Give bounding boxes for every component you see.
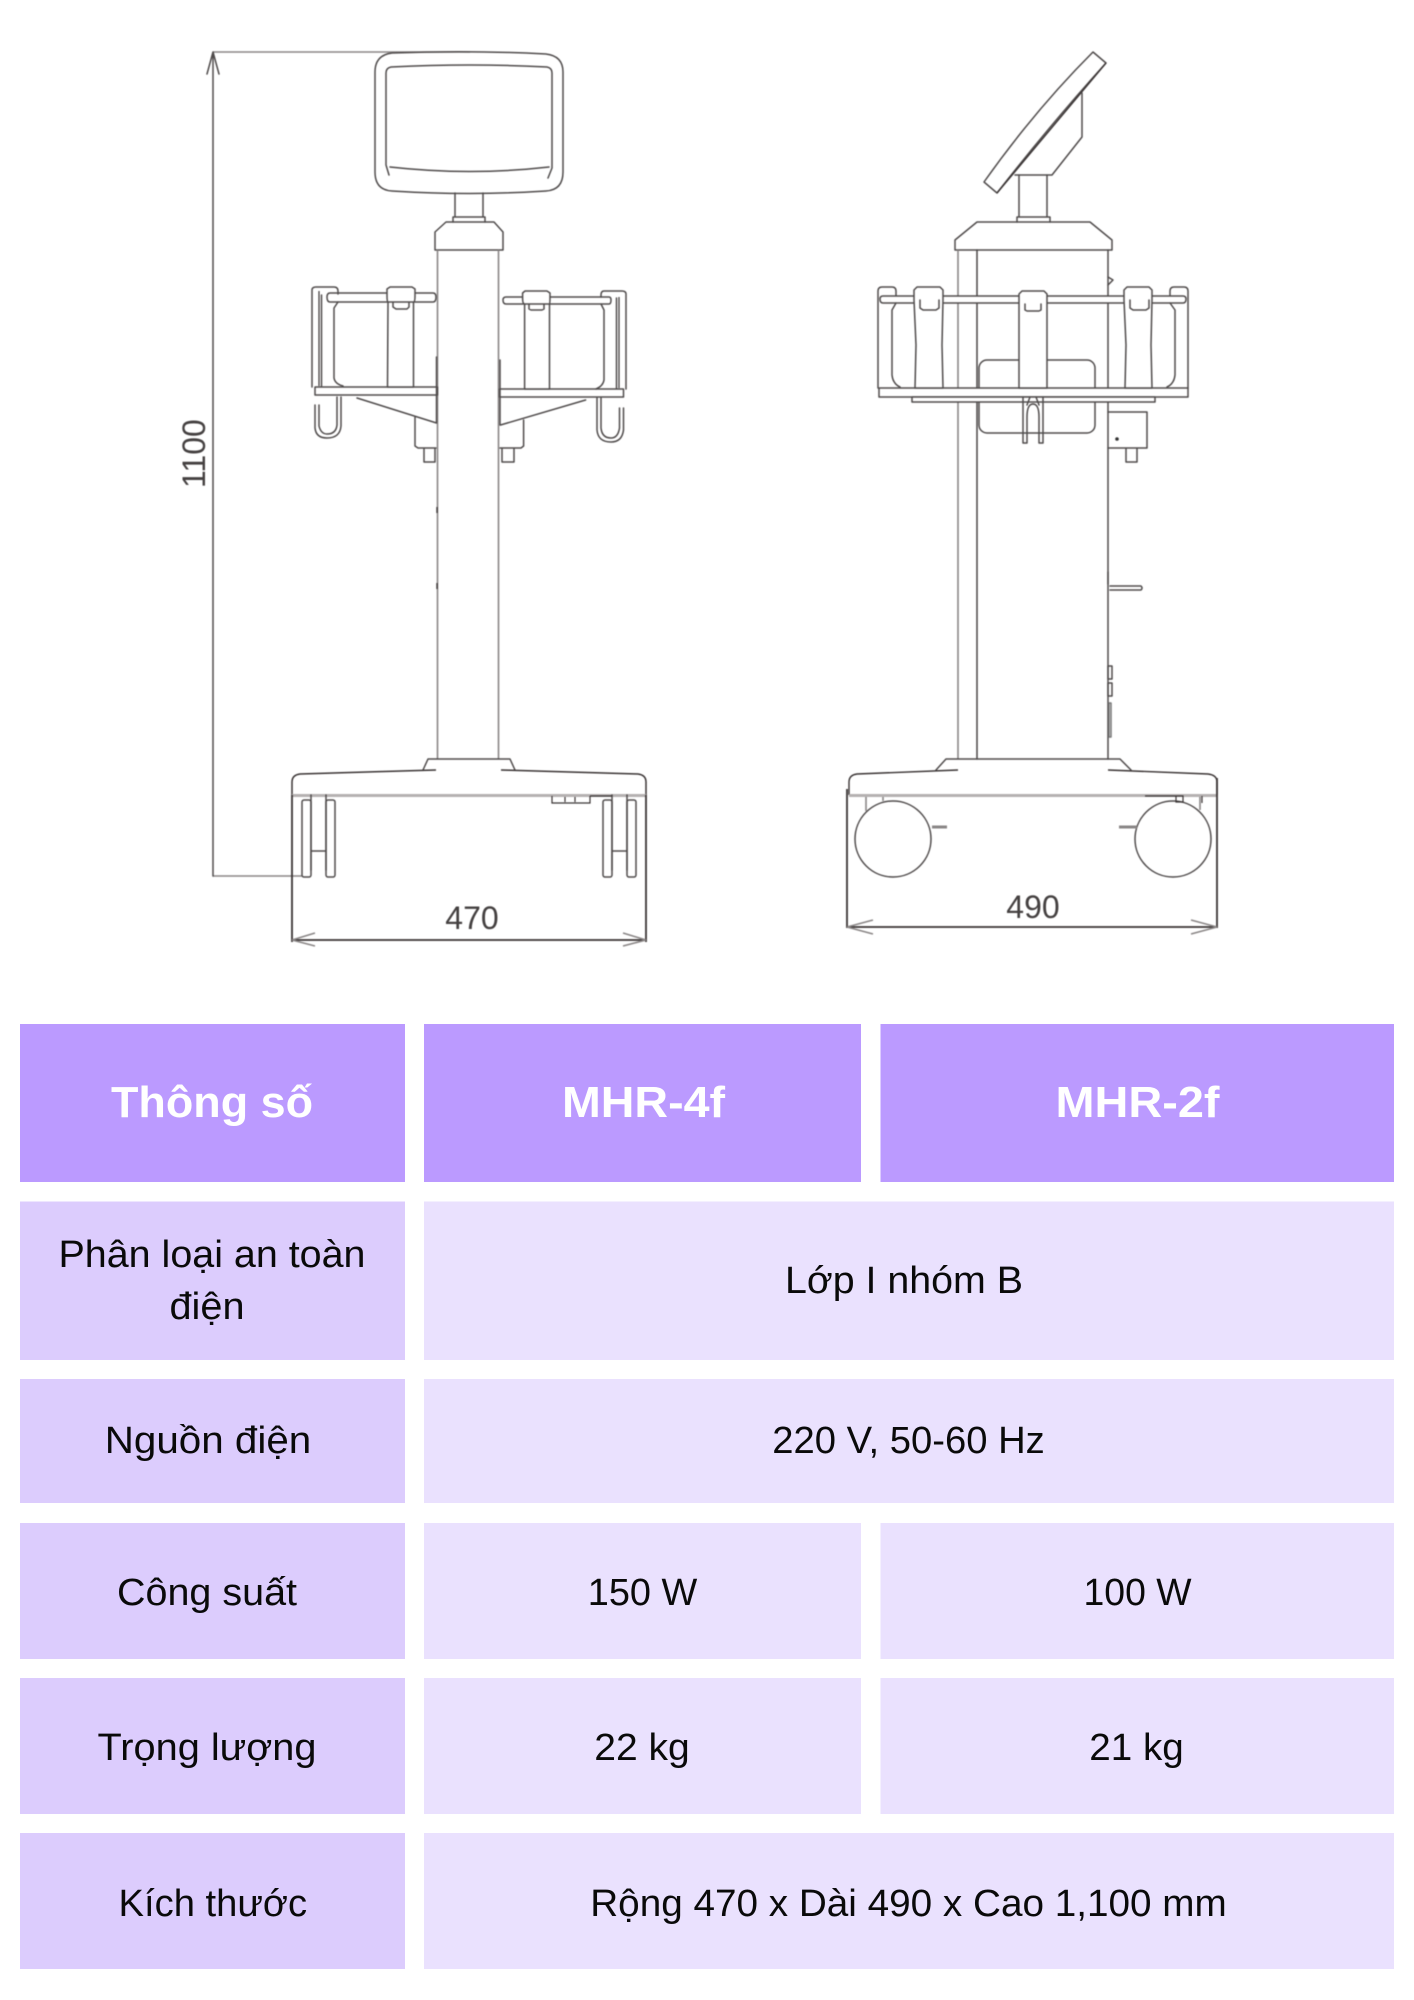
header cell: MHR-2f: MHR-2f: [1056, 1078, 1220, 1127]
dimension: depth 490: 490: [1006, 889, 1060, 925]
label cell: Kích thước: [119, 1883, 307, 1925]
row: weight: [20, 1678, 1394, 1814]
monitor front: [375, 52, 563, 193]
neck and collar: [435, 193, 503, 250]
neck and head: [955, 175, 1112, 250]
column: [438, 250, 498, 759]
label cell: [20, 1523, 405, 1659]
panel: specification table: [20, 1024, 1394, 1969]
label cell: Nguồn điện: [105, 1420, 311, 1462]
value cell: Rộng 470 x Dài 490 x Cao 1,100 mm: [590, 1883, 1227, 1925]
value cell: [424, 1379, 1394, 1503]
drawing: MHR-2f side view: [847, 52, 1217, 934]
dimension: width 470: [292, 795, 646, 946]
monitor side: [984, 52, 1106, 193]
label cell: [20, 1833, 405, 1969]
value cell: [424, 1202, 1394, 1360]
value cell: MHR-4f: [424, 1678, 861, 1814]
panel: technical drawings: [176, 52, 1217, 946]
body: [958, 250, 1113, 759]
value cell: 220 V, 50-60 Hz: [772, 1420, 1045, 1462]
value cell: MHR-4f: 150 W: [588, 1572, 697, 1614]
value cell: MHR-2f: [880, 1678, 1394, 1814]
header cell: MHR-4f: [424, 1024, 861, 1182]
row: dimensions: [20, 1833, 1394, 1969]
value cell: MHR-2f: 100 W: [1084, 1572, 1192, 1614]
value cell: [424, 1833, 1394, 1969]
value cell: MHR-2f: [880, 1523, 1394, 1659]
left basket: [312, 287, 438, 462]
side fittings: [1108, 572, 1142, 737]
value cell: MHR-4f: [424, 1523, 861, 1659]
basket: [878, 287, 1188, 462]
value cell: MHR-4f: 22 kg: [594, 1727, 690, 1769]
header cell: Thông số: Thông số: [111, 1078, 313, 1127]
label cell: Công suất: [117, 1572, 297, 1614]
dimension: height 1100: 1100: [176, 419, 212, 488]
base and wheels: [292, 759, 646, 877]
dimension: width 470: 470: [445, 900, 499, 936]
dimension: depth 490: [847, 778, 1217, 934]
label cell: [20, 1379, 405, 1503]
label cell: Phân loại an toàn: [58, 1234, 366, 1276]
row: power consumption: [20, 1523, 1394, 1659]
label cell: Trọng lượng: [98, 1727, 316, 1769]
base and wheels: [849, 759, 1217, 877]
value cell: MHR-2f: 21 kg: [1089, 1727, 1184, 1769]
row: electrical safety class: [20, 1202, 1394, 1360]
label cell: điện: [170, 1286, 244, 1328]
value cell: Lớp I nhóm B: [785, 1260, 1023, 1302]
table header row: [20, 1024, 1394, 1182]
header cell: MHR-4f: MHR-4f: [562, 1078, 725, 1127]
right basket: [500, 291, 626, 462]
row: power source: [20, 1379, 1394, 1503]
label cell: [20, 1678, 405, 1814]
dimension: height 1100: [176, 52, 470, 876]
header cell: MHR-2f: [880, 1024, 1394, 1182]
header cell: Thông số: [20, 1024, 405, 1182]
label cell: [20, 1202, 405, 1360]
drawing: MHR-4f front view: [176, 52, 646, 946]
